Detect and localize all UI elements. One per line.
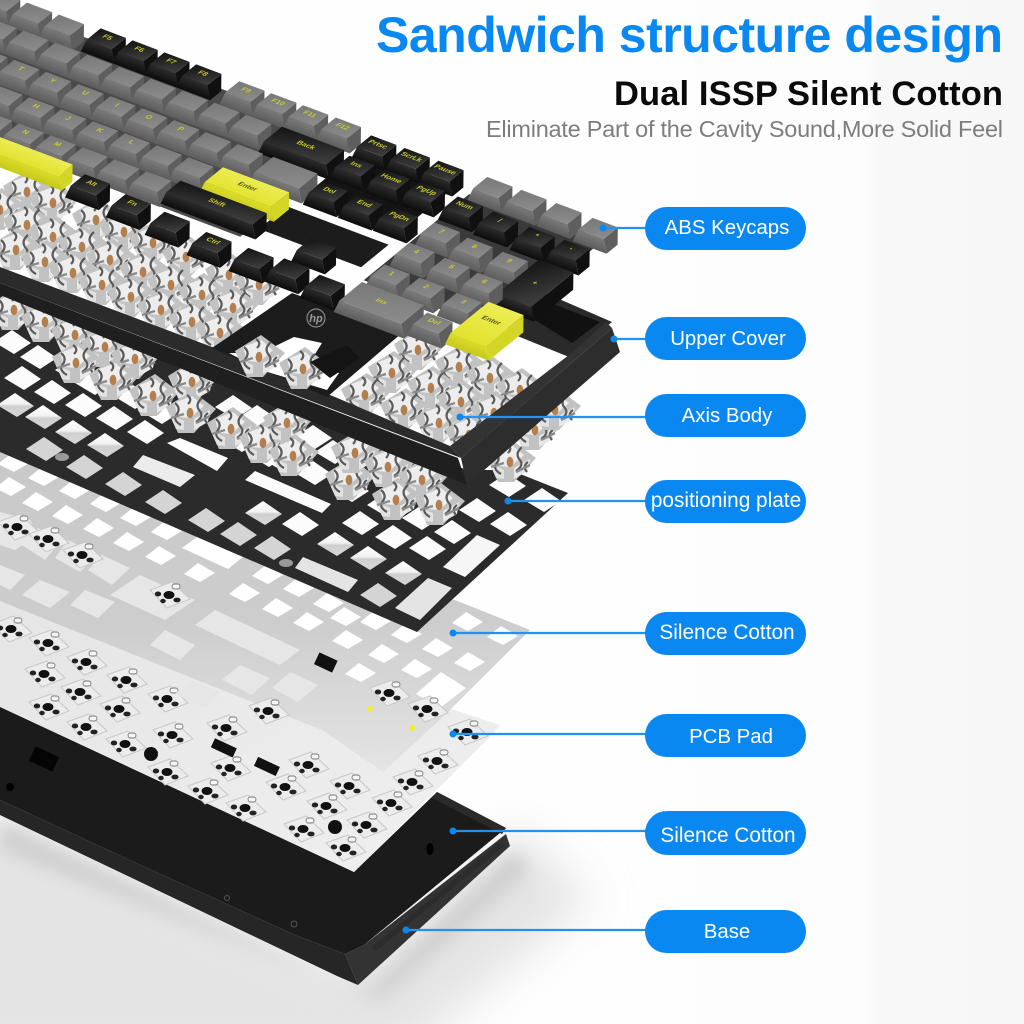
callout: Base: Base [704,921,750,943]
callout: Silence Cotton lower: Silence Cotton [660,824,796,847]
callout: Silence Cotton upper [450,612,806,655]
keycap legends: Y [47,77,59,84]
keycap legends: + [530,279,541,286]
callout: Base [402,910,806,953]
keycap legends: - [567,245,577,252]
keycap legends: 9 [504,257,515,264]
keycap legends: O [143,113,156,121]
keycap legends: PgUp [414,184,440,197]
keycap legends: 2 [421,283,432,290]
keycap legends: F5 [100,33,115,41]
keycap legends: 6 [479,278,490,285]
keycap legends: End [355,198,375,209]
keycap legends: I [113,102,122,108]
callout: positioning plate [504,480,806,523]
keycap legends: Ins [348,160,365,169]
heading: title: Sandwich structure design [376,7,1003,63]
keycap legends: F10 [269,97,288,107]
layer: axis body switches above cover [0,170,285,353]
keycap legends: Ins [373,297,390,306]
keycap legends: J [63,115,73,122]
layer: ABS keycaps [0,0,645,367]
layer: ABS keycaps: Enter [235,180,260,193]
keycap legends: ScrLk [399,150,426,164]
callout: Axis Body: Axis Body [682,405,773,427]
keycap legends: PgDn [387,210,412,223]
cover: numpad opening with switches [335,328,569,455]
keycap legends: Prtsc [366,138,390,150]
callout: ABS Keycaps [600,207,806,250]
keycap legends: F8 [196,69,211,77]
callout: PCB Pad [450,714,806,757]
icon: HP logo [307,309,325,327]
keycap legends: Home [379,172,405,185]
callout: Upper Cover: Upper Cover [670,328,786,350]
floor shadow wide [0,790,590,1024]
layer: positioning plate [0,285,568,632]
keycap legends: F9 [239,86,254,94]
keycap legends: U [80,89,91,97]
layer: ABS keycaps: Enter [479,314,504,326]
keycap legends: 7 [436,228,447,235]
keycap legends [0,21,611,341]
icon: HP logo: hp [309,313,323,325]
keycap legends: M [51,140,64,148]
keycap legends: N [20,128,32,136]
layer: base [0,705,510,985]
layer: silence cotton [0,440,530,772]
keycap legends: 5 [446,263,457,270]
keycap legends: F6 [132,45,147,53]
callout: Axis Body [456,394,806,437]
keycap legends: 3 [458,298,469,305]
keycap legends: Alt [84,178,100,188]
keycap legends: P [175,125,187,133]
keycap legends: F11 [301,109,319,119]
keycap legends: Del [321,185,338,195]
callout: PCB Pad: PCB Pad [689,726,773,748]
keycap legends: H [30,102,42,110]
keycap legends: F12 [333,121,352,131]
keycap legends: Pause [432,163,459,176]
keycap legends: Back [294,139,319,151]
layer: PCB pad [0,560,500,872]
keycap legends: 1 [386,270,397,277]
keycap legends: Fn [125,199,140,207]
keycap legends: Ctrl [204,236,223,246]
keycap legends: * [532,232,541,239]
keycap legends: 8 [469,243,480,250]
keycap legends: K [94,126,107,134]
keycap legends: Num [454,200,476,211]
keycap legends: / [496,217,504,223]
callout: Silence Cotton upper: Silence Cotton [659,621,795,644]
callout: Silence Cotton lower [450,811,806,855]
callout: Upper Cover [610,317,806,360]
keycap legends: Shift [206,197,229,208]
layer: upper cover [0,267,620,485]
keycap legends: Del [425,317,443,326]
text: tagline: Eliminate Part of the Cavity Sound,More Solid Feel [486,116,1003,142]
keycap legends: 4 [411,248,423,255]
heading: subtitle: Dual ISSP Silent Cotton [614,75,1003,113]
layer: axis body switches below cover [0,288,581,525]
callout: ABS Keycaps: ABS Keycaps [665,217,789,239]
keycap legends: F7 [164,57,179,65]
callout: positioning plate: positioning plate [651,489,801,512]
keycap legends: L [126,138,138,146]
keycap legends: T [16,65,27,72]
floor shadow near base [0,820,530,1000]
